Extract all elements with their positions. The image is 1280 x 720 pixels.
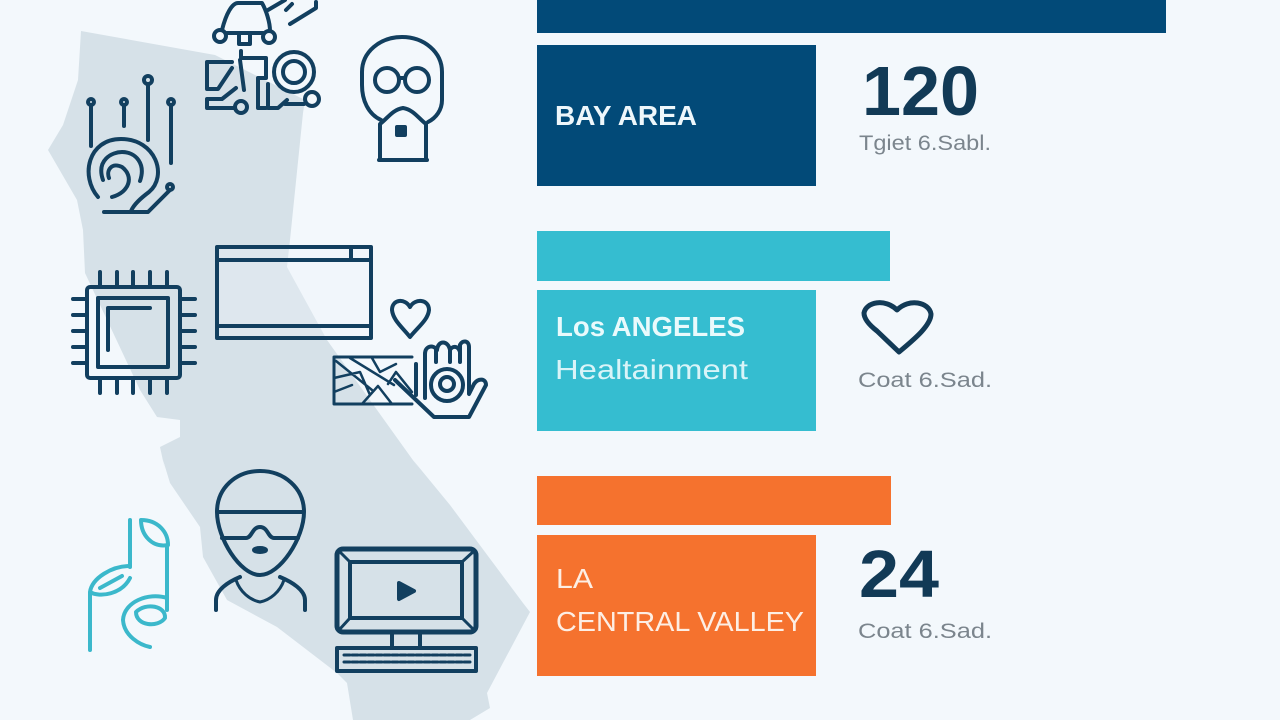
icon: processor chip: [73, 272, 195, 393]
map: California silhouette: [48, 31, 530, 720]
stat: Bay Area value: [859, 52, 991, 155]
icon: hand with map and eye: [334, 341, 486, 417]
panel: Bay Area label box: BAY AREA: [555, 100, 697, 131]
icon: face with glasses: [362, 37, 442, 160]
icon: computer with play button: [337, 549, 476, 671]
stat: Central Valley value: [858, 537, 992, 643]
panel: Bay Area label box: [537, 45, 816, 186]
icon: circuit machine: [207, 0, 319, 113]
icon: person with VR visor: [216, 471, 305, 610]
stat: Bay Area value: 120: [862, 52, 979, 130]
stat: Central Valley value: Coat 6.Sad.: [858, 620, 992, 643]
stat: Los Angeles heart and caption: Coat 6.Sad.: [858, 369, 992, 392]
panel: Los Angeles label box: Los ANGELES: [556, 311, 745, 342]
icon: music notes: [90, 520, 168, 650]
stat: Central Valley value: 24: [859, 537, 939, 612]
panel: Central Valley label box: [537, 535, 816, 676]
icon: browser window: [217, 247, 371, 338]
icon: antenna spiral: [88, 76, 174, 212]
panel: Central Valley label box: LA: [556, 563, 593, 594]
stat: Los Angeles heart and caption: [858, 303, 992, 392]
panel: Los Angeles label box: [537, 290, 816, 431]
panel: Central Valley top bar: [537, 476, 891, 525]
panel: Central Valley label box: CENTRAL VALLEY: [556, 606, 804, 637]
panel: Los Angeles label box: Healtainment: [555, 354, 748, 385]
panel: Los Angeles top bar: [537, 231, 890, 281]
panel: Bay Area top bar: [537, 0, 1166, 33]
icon: small heart: [392, 301, 429, 337]
stat: Bay Area value: Tgiet 6.Sabl.: [859, 132, 991, 155]
